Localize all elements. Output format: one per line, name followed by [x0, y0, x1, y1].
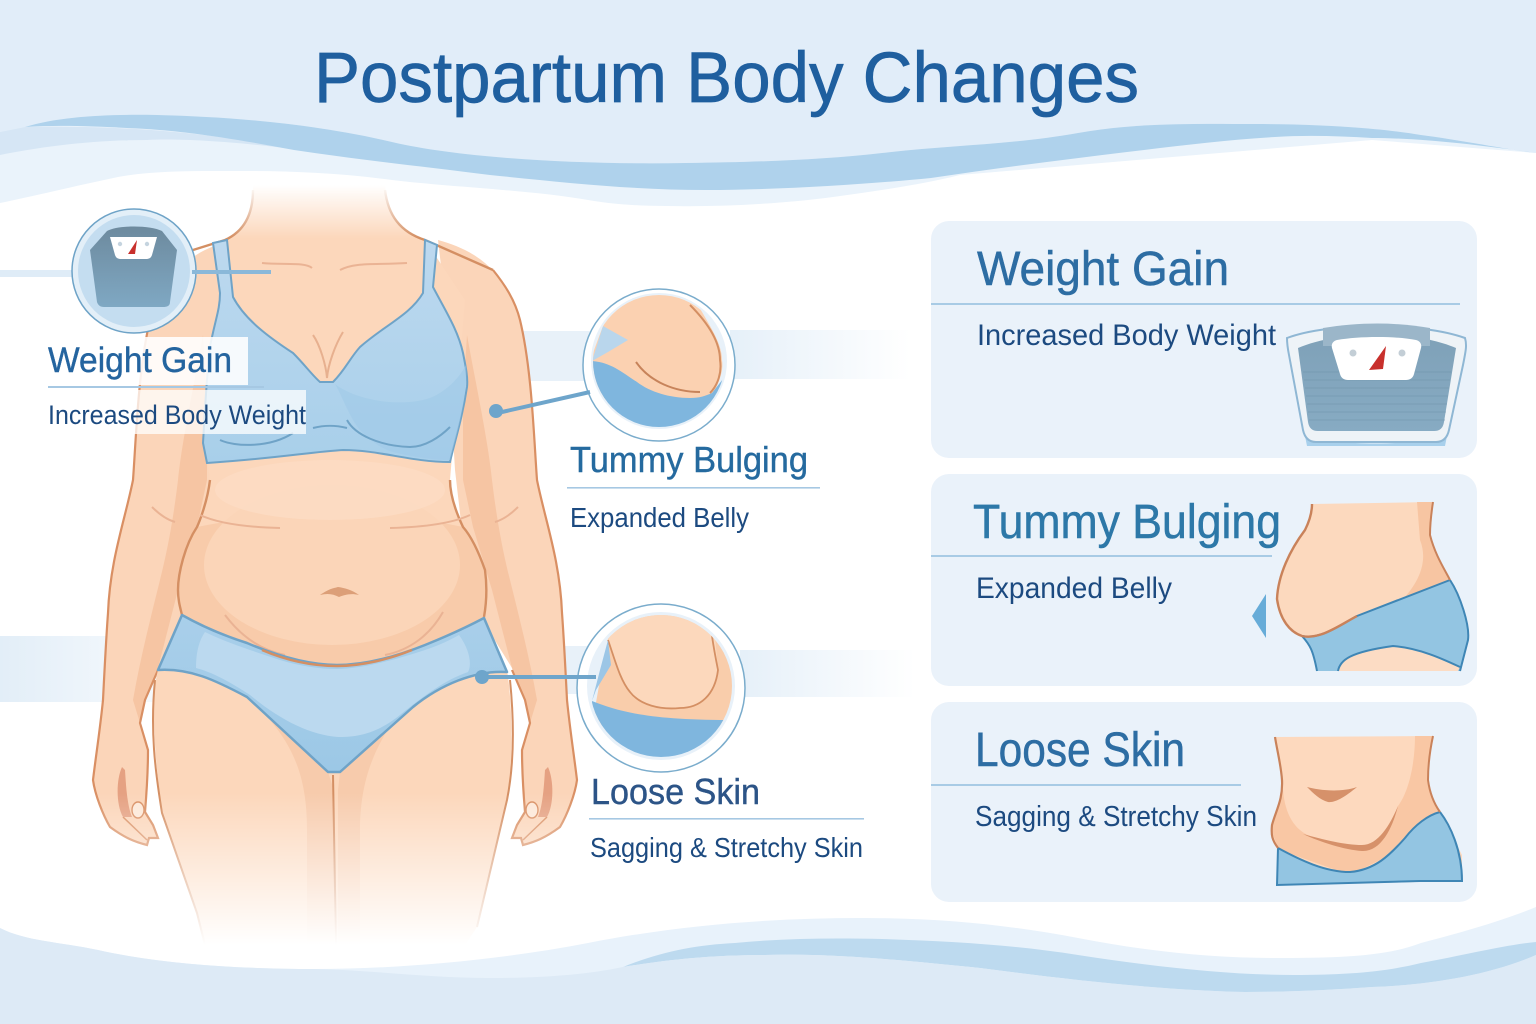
- cup shade: [335, 365, 466, 460]
- callout: loose skin circle: [475, 600, 745, 772]
- header fill: [0, 0, 1536, 163]
- body illustration: [93, 185, 577, 945]
- scale icon: [90, 226, 177, 307]
- dark wave ribbon: [623, 938, 1536, 992]
- callout: tummy bulging circle: [489, 289, 735, 441]
- thumbnails: [132, 802, 538, 818]
- dark wave ribbon: [25, 115, 1536, 190]
- right arm: [438, 240, 577, 845]
- subtext: Increased Body Weight: [48, 400, 306, 430]
- underwear: [158, 615, 507, 772]
- belly highlight: [204, 516, 460, 645]
- card heading: Loose Skin: [975, 724, 1185, 777]
- bottom wave band: [0, 907, 1536, 1024]
- base fill: [0, 928, 1536, 1024]
- icon: bathroom scale: [1287, 324, 1466, 446]
- belly fold line: [262, 650, 412, 666]
- light wave: [0, 907, 1536, 1024]
- card subtext: Increased Body Weight: [977, 319, 1277, 352]
- label: loose skin: [589, 771, 864, 863]
- card subtext: Sagging & Stretchy Skin: [975, 801, 1257, 833]
- card heading: Tummy Bulging: [973, 496, 1281, 549]
- arms: [93, 240, 577, 845]
- arm outlines: [93, 250, 577, 845]
- cup lines: [220, 420, 450, 447]
- right inner arm shade: [463, 335, 537, 723]
- torso outline: [153, 190, 513, 945]
- callout: scale circle: [72, 209, 271, 333]
- connector line: [192, 270, 271, 274]
- subtext: Sagging & Stretchy Skin: [590, 832, 863, 863]
- pale background strips: [0, 270, 915, 702]
- panel: loose skin card: [931, 702, 1477, 902]
- dot: [475, 670, 489, 684]
- subtext: Expanded Belly: [570, 502, 749, 533]
- stomach illustration: [1272, 736, 1462, 885]
- dot: [489, 404, 503, 418]
- connector: [502, 392, 590, 412]
- label: loose skin: Loose Skin: [591, 771, 760, 812]
- belly shading: [178, 515, 486, 665]
- thigh shading: [272, 722, 385, 862]
- navel: [320, 587, 359, 597]
- label: tummy bulging: Tummy Bulging: [570, 439, 808, 480]
- left arm: [94, 246, 219, 844]
- card subtext: Expanded Belly: [976, 572, 1172, 605]
- collarbones and creases: [152, 263, 518, 655]
- thumb shadows: [118, 767, 132, 817]
- heading: Weight Gain: [48, 341, 232, 380]
- label: tummy bulging: [567, 439, 820, 533]
- panel: weight gain card: [931, 221, 1477, 458]
- card heading: Weight Gain: [977, 243, 1229, 296]
- torso and legs: [154, 185, 512, 945]
- upper belly highlight: [241, 485, 422, 520]
- top header band: [0, 0, 1536, 206]
- belly illustration: [1277, 502, 1468, 671]
- left inner arm shade: [133, 335, 207, 723]
- title: Postpartum Body Changes: [314, 39, 1139, 118]
- mid-tone band: [0, 127, 300, 155]
- pale under-wave: [0, 0, 1536, 206]
- connector: [486, 675, 596, 679]
- bra: [203, 240, 467, 463]
- base under ribbon: [600, 955, 1536, 1024]
- panel: tummy bulging card: [931, 474, 1477, 686]
- arrow: [1252, 594, 1266, 638]
- label panel: weight gain: [48, 337, 306, 434]
